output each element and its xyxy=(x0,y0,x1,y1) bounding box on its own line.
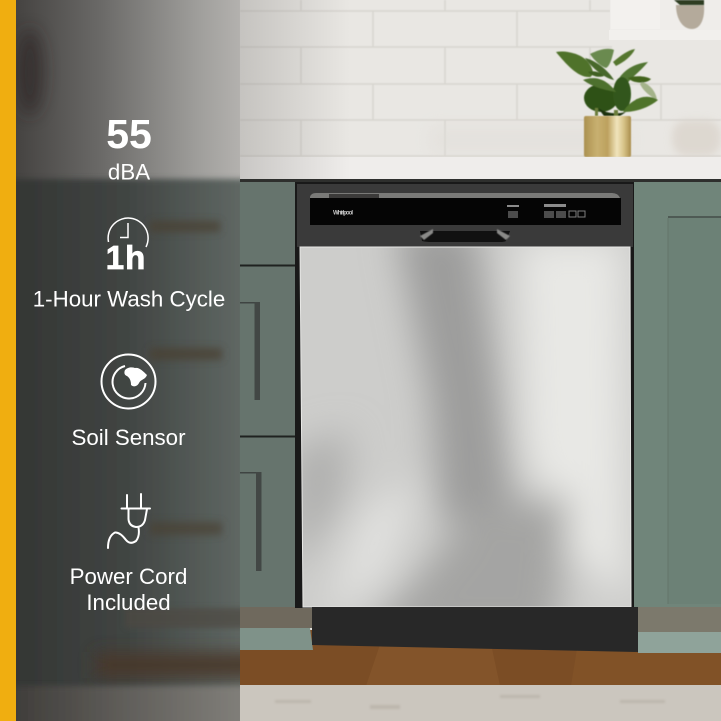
feature: soil sensor xyxy=(71,354,186,450)
handle xyxy=(420,229,510,242)
wall shadow next to panel xyxy=(240,0,350,179)
soil sensor label: Soil Sensor xyxy=(71,425,186,450)
leaves xyxy=(556,49,658,116)
dBA label: dBA xyxy=(108,160,150,184)
left blurred panel xyxy=(16,0,240,721)
feature: power cord: Included xyxy=(86,590,171,615)
icon: clock with 1h xyxy=(106,218,148,276)
icon: plug and cord xyxy=(108,494,150,548)
right green cabinet xyxy=(633,182,721,653)
left green cabinet xyxy=(240,182,314,650)
small pot on shelf xyxy=(676,5,704,29)
control buttons xyxy=(507,204,585,218)
floor xyxy=(240,630,721,721)
tile wall xyxy=(240,0,721,160)
55 figure: 55 xyxy=(106,111,152,157)
toe kick xyxy=(312,607,638,652)
countertop xyxy=(240,157,721,180)
feature: noise level xyxy=(106,111,152,184)
kitchen background photo xyxy=(240,0,721,721)
wash cycle label: 1-Hour Wash Cycle xyxy=(33,286,225,312)
power cord label: Power Cord xyxy=(70,564,187,589)
control strip xyxy=(310,193,620,198)
icon: clock with 1h: 1h xyxy=(106,239,146,276)
brass pot xyxy=(584,116,631,157)
dishwasher xyxy=(290,182,638,652)
rug mottling xyxy=(275,695,665,709)
brand logo: Whirlpool xyxy=(333,210,353,216)
yellow accent bar xyxy=(0,0,16,721)
feature: power cord xyxy=(70,494,187,615)
icon: soil sensor xyxy=(102,354,156,408)
plant on counter xyxy=(556,0,704,157)
steel door xyxy=(300,246,632,608)
feature: wash cycle xyxy=(33,218,225,312)
door reflections xyxy=(302,248,630,606)
